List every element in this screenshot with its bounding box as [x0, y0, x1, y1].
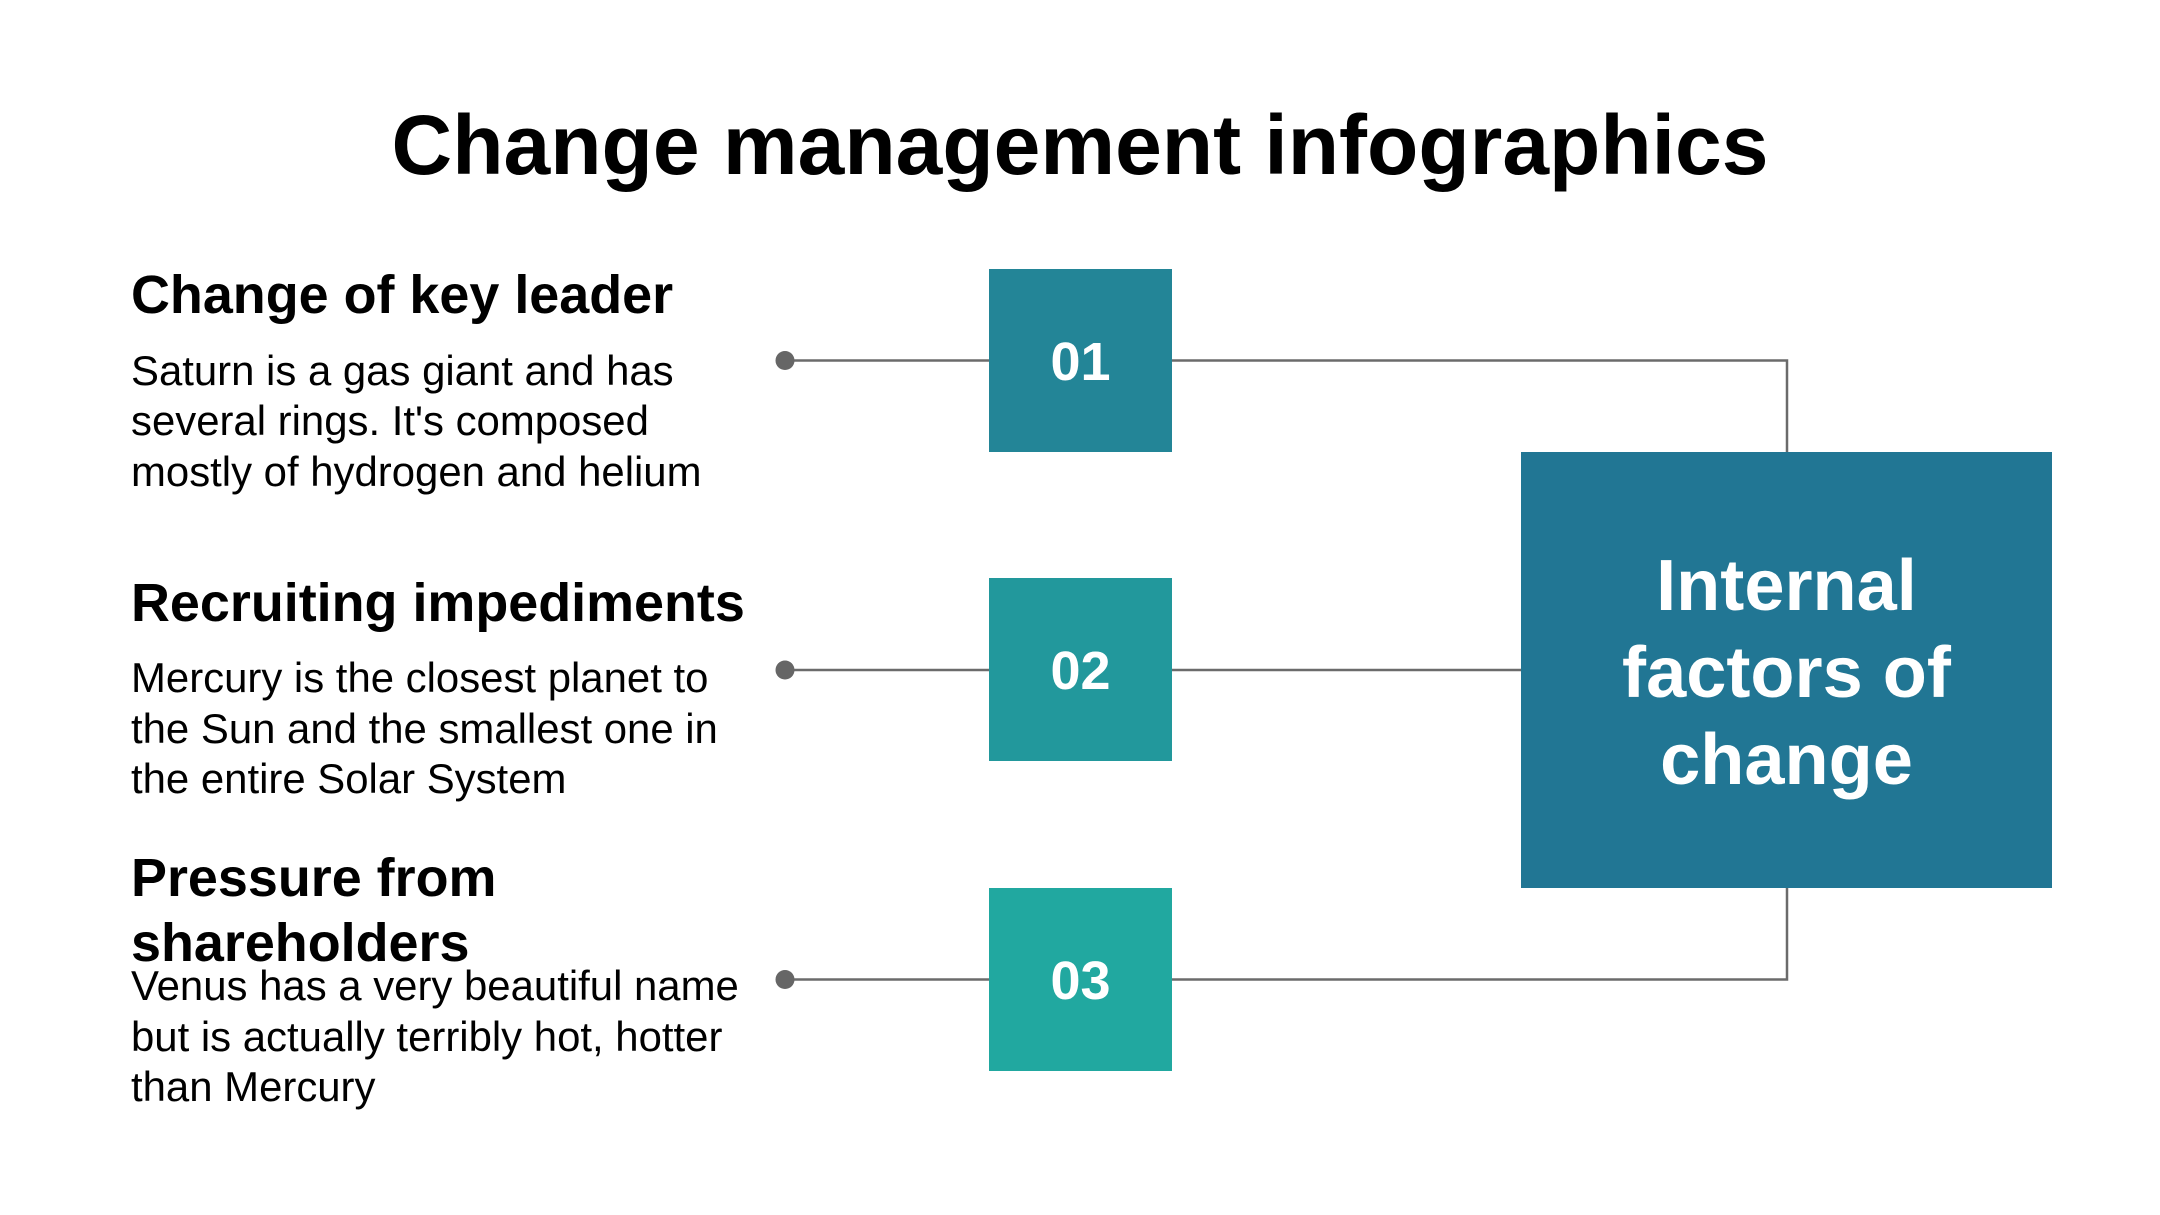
main box: internal factors of change: change [1660, 720, 1913, 800]
item 2 text: the Sun and the smallest one in [131, 705, 718, 752]
title: Change management infographics [392, 98, 1768, 192]
item 2 text [131, 654, 718, 802]
number box 02: 02 [1050, 641, 1111, 701]
item 3 text [131, 962, 739, 1110]
item 3 text: than Mercury [131, 1063, 375, 1110]
item 3 heading [131, 848, 496, 973]
main box: internal factors of change: Internal [1656, 546, 1917, 626]
item 1 text: several rings. It's composed [131, 397, 649, 444]
main box: internal factors of change: factors of [1622, 632, 1951, 712]
number box 01 [989, 269, 1172, 452]
number box 03: 03 [1050, 951, 1111, 1011]
item 3 text: Venus has a very beautiful name [131, 962, 739, 1009]
number box 01: 01 [1050, 332, 1111, 392]
item 3 heading: Pressure from [131, 848, 496, 908]
item 3 text: but is actually terribly hot, hotter [131, 1013, 722, 1060]
item 2 heading: Recruiting impediments [131, 573, 745, 633]
item 2 text: the entire Solar System [131, 755, 566, 802]
item 2 text: Mercury is the closest planet to [131, 654, 708, 701]
item 3 heading: shareholders [131, 913, 469, 973]
item 1 text [131, 346, 702, 495]
item 1 text: Saturn is a gas giant and has [131, 346, 674, 394]
number box 02 [989, 578, 1172, 761]
item 1 text: mostly of hydrogen and helium [131, 448, 702, 495]
number box 03 [989, 888, 1172, 1071]
item 1 heading: Change of key leader [131, 265, 673, 325]
main box: internal factors of change [1521, 452, 2052, 888]
